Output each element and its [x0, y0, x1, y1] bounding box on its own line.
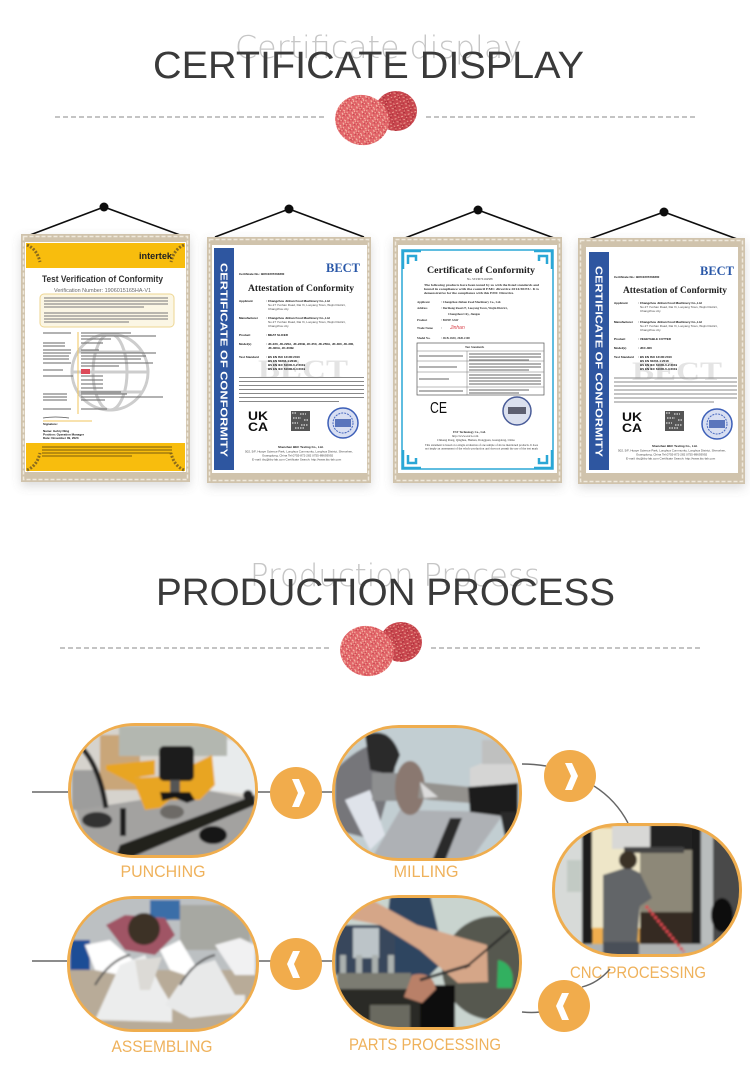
certificate number: Certificate No.: BRC2207204800: [239, 272, 285, 276]
test standards table: Test Standards: [465, 345, 485, 349]
label: milling: MILLING: [394, 862, 458, 881]
issuer: [245, 445, 353, 462]
main title: CERTIFICATE DISPLAY: [153, 45, 584, 87]
certificate 1: Intertek test verification: [21, 202, 190, 486]
verification number: Verification Number: 1906015165HA-V1: [54, 288, 151, 294]
step: parts processing: [332, 895, 522, 1030]
details: : BS EN ISO 12100:2010: [638, 355, 672, 359]
label: parts processing: PARTS PROCESSING: [349, 1035, 501, 1054]
details: Changzhou city: [640, 328, 661, 332]
ghost script title: Certificate display: [235, 30, 522, 66]
UKCA mark: CA: [622, 421, 642, 435]
blue side strip: [589, 252, 609, 470]
blue side strip: CERTIFICATE OF CONFORMITY: [592, 266, 604, 457]
milling lathe photo: [332, 725, 522, 861]
details: Manufacturer: [239, 316, 259, 320]
ghost script title: Production Process: [250, 558, 540, 594]
details: Model(s): [614, 346, 626, 350]
hanger: [30, 202, 180, 235]
watermark: BECT: [258, 355, 348, 384]
details: [614, 301, 718, 371]
details: : JKC-300: [638, 346, 652, 350]
UKCA mark: CA: [248, 420, 268, 434]
QR code: [665, 411, 684, 431]
details: Model(s): [239, 342, 251, 346]
icon: meat patties: [334, 620, 422, 682]
CNC machine photo: [552, 823, 742, 957]
details: [417, 300, 508, 340]
details column: [43, 332, 163, 414]
QR code: [291, 411, 310, 431]
yellow bands: [26, 243, 185, 471]
issuer: http://www.estcn.com: [452, 434, 479, 438]
details: Test Standard: [614, 355, 634, 359]
details: Product: [417, 318, 427, 322]
UKCA mark: [248, 409, 268, 434]
details: BS EN IEC 61000-6-2:2019: [640, 363, 678, 367]
details: : Changzhou Jinhan Food Machinery Co., Ltd.: [441, 300, 501, 304]
details: Applicant: [417, 300, 430, 304]
arrow: punching to milling: [270, 767, 322, 819]
details: : Darihong Road 27, Luoyang Town, Wujin District,: [441, 306, 508, 310]
watermark globe: [72, 334, 148, 410]
statement: No. ST2307Z104588: [467, 277, 493, 281]
section heading: production process: [60, 558, 700, 682]
statement: The following products have been tested by us with the listed standards and: [424, 283, 539, 287]
details: : MEAT SLICER: [266, 333, 289, 337]
issuer: Shenzhen BEC Testing Co., Ltd.: [652, 444, 698, 448]
assembly workshop photo: [67, 896, 259, 1032]
arrow: parts processing to assembling: [270, 938, 322, 990]
details: BS EN 60204-1:2018: [268, 359, 297, 363]
issuer: not imply an assessment of the whole production and does not permit the use of the test mark: [425, 446, 538, 450]
photo frame: [552, 823, 742, 957]
step: punching: [68, 723, 258, 858]
BECT logo: BECT: [700, 263, 734, 278]
statement paragraph: [614, 378, 737, 402]
issuer: E-mail: tbc@tbc-lab.com Certificate Search: http://www.tbc-lab.com: [626, 456, 716, 460]
details: Changzhou city: [640, 309, 661, 313]
label: CNC processing: CNC PROCESSING: [570, 963, 706, 982]
details: Manufacturer: [614, 320, 634, 324]
photo frame: [332, 895, 522, 1030]
details: BS EN 60204-1:2018: [640, 359, 669, 363]
details: : Changzhou Jinhan Food Machinery Co.,Ltd: [638, 301, 702, 305]
label: assembling: ASSEMBLING: [112, 1037, 212, 1056]
issuer: Guangdong, China Tel:0755-872-282 0755-89693992: [262, 454, 334, 458]
frame: [393, 237, 562, 483]
issuer: EST Technology Co., Ltd.: [453, 430, 486, 434]
section heading: certificate display: [55, 30, 697, 151]
details: Applicant: [239, 299, 253, 303]
step: milling: [332, 725, 522, 861]
details: BS EN IEC 61000-6-4:2019: [268, 367, 306, 371]
issuer: 502, 5/F, Huaye Science Park, Longhua Community, Longhua District, Shenzhen,: [618, 448, 726, 452]
label: punching: PUNCHING: [120, 862, 206, 881]
arrow: milling to CNC: [544, 750, 596, 802]
frame: [207, 237, 371, 483]
details: No.27 Yunhan Road, Dai Xi, Luoyang Town, Wujin District,: [640, 324, 718, 328]
step: CNC processing: [552, 823, 742, 957]
certificate title: Attestation of Conformity: [248, 284, 354, 294]
certificate 2: BECT attestation, meat slicer: [207, 204, 371, 487]
divider left: [60, 647, 331, 649]
details: : Changzhou Jinhan Food Machinery Co.,Ltd: [638, 320, 702, 324]
details: Address: [417, 306, 428, 310]
statement: found in compliance with the council EMC directive 2014/30/EU. It is: [424, 287, 540, 291]
details: Changzhou City, Jiangsu: [448, 312, 480, 316]
details: Test Standard: [239, 355, 259, 359]
details: Model No.: [417, 336, 431, 340]
main title: PRODUCTION PROCESS: [156, 572, 615, 614]
details: BS EN IEC 61000-6-2:2019: [268, 363, 306, 367]
details: [239, 299, 354, 371]
arrow: CNC to parts processing: [538, 980, 590, 1032]
details: : Changzhou Jinhan Food Machinery Co.,Ltd: [266, 316, 330, 320]
icon: meat patties: [329, 89, 417, 151]
watermark: BECT: [632, 357, 722, 386]
details: Product: [614, 337, 625, 341]
details: BS EN IEC 61000-6-4:2019: [640, 367, 678, 371]
CE mark: CE: [430, 400, 447, 417]
process flow connector lines: [32, 764, 628, 1012]
footer note: [42, 447, 172, 456]
blue side strip: [214, 248, 234, 470]
details: Product: [239, 333, 250, 337]
details: JK-300A, JK-300B: [268, 346, 295, 350]
statement paragraph: [239, 378, 364, 402]
issuer: This statement is based on a single evaluation of one sample of above mentioned products. It does: [425, 443, 539, 447]
signature block: Name: Gehry Ning: [43, 429, 69, 433]
statement: [424, 277, 540, 295]
Intertek logo: intertek: [139, 251, 173, 261]
issuer: E-mail: tbc@tbc-lab.com Certificate Search: http://www.tbc-lab.com: [252, 458, 342, 462]
step: assembling: [67, 896, 259, 1032]
issuer: Guangdong, China Tel:0755-872-282 0755-89693992: [636, 452, 708, 456]
parts machining photo: [335, 898, 519, 1027]
hanger: [215, 204, 364, 237]
statement: demonstrative for the compliance with this EMC Directive.: [424, 291, 514, 295]
details: Changzhou city: [268, 324, 289, 328]
details: No.27 Yunhan Road, Dai Xi, Luoyang Town, Wujin District,: [268, 320, 346, 324]
details: :: [441, 326, 442, 330]
statement box: [40, 294, 174, 327]
details: Applicant: [614, 301, 628, 305]
issuer: 502, 5/F, Huaye Science Park, Longhua Community, Longhua District, Shenzhen,: [245, 450, 353, 454]
divider right: [431, 647, 700, 649]
blue side strip: CERTIFICATE OF CONFORMITY: [218, 263, 230, 457]
seal: [328, 408, 358, 438]
details: : BS EN ISO 12100:2010: [266, 355, 300, 359]
issuer: Shenzhen BEC Testing Co., Ltd.: [278, 445, 324, 449]
certificate 4: BECT attestation, vegetable cutter: [578, 208, 745, 488]
details: : JK-220, JK-220A, JK-220B, JK-250, JK-250A, JK-300, JK-300,: [266, 342, 354, 346]
test standards table: [417, 343, 544, 395]
signature block: Date: November 09, 2023: [43, 436, 79, 440]
divider right: [426, 116, 697, 118]
details: : JKB-1650, JKB-2100: [441, 336, 470, 340]
issuer: [618, 444, 726, 460]
seal: [702, 409, 732, 439]
BECT logo: BECT: [326, 260, 360, 275]
details: Trade Name: [417, 326, 434, 330]
certificate title: Test Verification of Conformity: [42, 274, 164, 285]
certificate 3: EST certificate of conformity, bone saw: [393, 206, 562, 487]
frame: [578, 238, 745, 484]
UKCA mark: UK: [248, 409, 268, 423]
hanger: [589, 208, 737, 239]
details: No.27 Yunhan Road, Dai Xi, Luoyang Town, Wujin District,: [268, 303, 346, 307]
seal: [503, 397, 531, 425]
connector: CNC label to lower arrow: [582, 969, 610, 987]
cyan meander border: [402, 250, 553, 469]
photo frame: [67, 896, 259, 1032]
signature block: Position: Operation Manager: [43, 432, 85, 436]
punching machine photo: [68, 723, 258, 858]
details: Jinhan: [449, 325, 465, 331]
hanger: [405, 206, 554, 238]
details: : BONE SAW: [441, 318, 459, 322]
details: : Changzhou Jinhan Food Machinery Co.,Ltd: [266, 299, 330, 303]
issuer: [425, 430, 539, 450]
details: : VEGETABLE CUTTER: [638, 337, 672, 341]
photo frame: [68, 723, 258, 858]
frame: [21, 234, 190, 482]
divider left: [55, 116, 326, 118]
UKCA mark: UK: [622, 410, 642, 424]
signature block: Signature:: [43, 422, 58, 426]
details: No.27 Yunhan Road, Dai Xi, Luoyang Town, Wujin District,: [640, 305, 718, 309]
certificate number: Certificate No.: BRC2207204800: [614, 275, 660, 279]
issuer: Chikeng Rong, Qinghua, Humen, Dongguan, Guangdong, China: [437, 438, 515, 443]
signature block: [43, 417, 92, 440]
photo frame: [332, 725, 522, 861]
certificate title: Certificate of Conformity: [427, 266, 535, 276]
details: Changzhou city: [268, 307, 289, 311]
UKCA mark: [622, 410, 642, 435]
certificate title: Attestation of Conformity: [623, 286, 727, 296]
